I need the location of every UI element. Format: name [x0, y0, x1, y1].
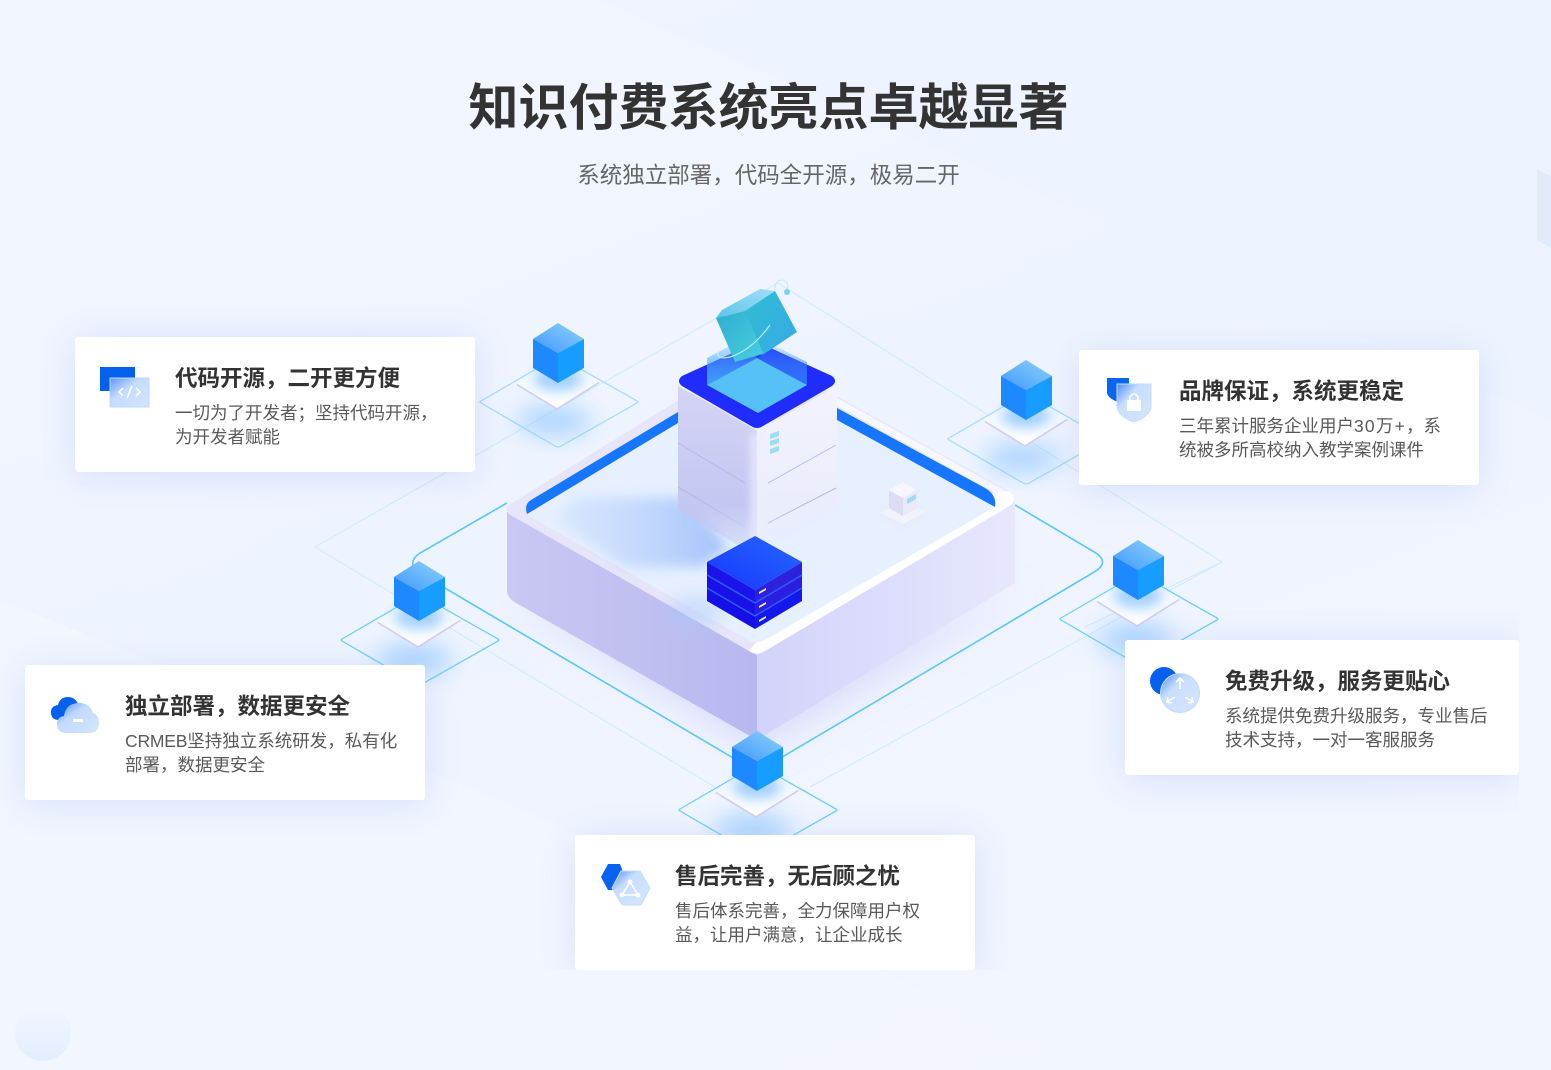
card text: 部署，数据更安全 — [125, 755, 265, 775]
card text — [676, 902, 920, 943]
stack shadow — [667, 596, 723, 628]
icon: code window — [100, 367, 150, 408]
card text: 系统提供免费升级服务，专业售后 — [1225, 706, 1488, 726]
card heading: 品牌保证，系统更稳定 — [1179, 379, 1404, 404]
card text: CRMEB坚持独立系统研发，私有化 — [125, 731, 397, 751]
node: top right — [948, 360, 1106, 484]
card heading: 免费升级，服务更贴心 — [1225, 669, 1450, 694]
platform surface — [527, 420, 991, 642]
card text — [1226, 706, 1487, 748]
node: left — [341, 561, 499, 685]
blue server stack — [707, 536, 802, 629]
rim back right — [837, 398, 1008, 492]
faint outer diamond lines — [315, 283, 1222, 790]
glass walls — [707, 338, 757, 385]
card text: 售后体系完善，全力保障用户权 — [675, 901, 920, 921]
platform shadow — [500, 590, 1025, 750]
card text: 为开发者赋能 — [175, 427, 280, 447]
platform right wall — [757, 500, 1015, 740]
subtitle: 系统独立部署，代码全开源，极易二开 — [577, 163, 960, 188]
icon: cloud — [51, 697, 99, 733]
card text: 统被多所高校纳入教学案例课件 — [1179, 440, 1424, 460]
panel: 品牌保证 — [1079, 350, 1479, 485]
node: bottom — [679, 731, 837, 855]
card text — [1179, 416, 1441, 460]
card text — [175, 403, 438, 447]
tower body — [678, 386, 837, 556]
central platform — [500, 354, 1025, 750]
platform rim — [506, 354, 1014, 654]
icon: upgrade circle — [1150, 667, 1200, 713]
tower vents — [770, 431, 779, 454]
floating teal cube — [716, 280, 797, 362]
tower right face — [758, 392, 837, 473]
panel: 免费升级 — [1125, 640, 1519, 775]
icon: shield — [1107, 378, 1152, 422]
card text: 三年累计服务企业用户30万+，系 — [1179, 416, 1441, 436]
card text — [125, 731, 397, 775]
tower screen — [707, 358, 807, 413]
bright connector diamond — [413, 503, 1102, 772]
card text: 一切为了开发者；坚持代码开源， — [175, 403, 438, 423]
tower cast shadow — [556, 497, 728, 567]
isometric illustration — [314, 280, 1223, 835]
title: 知识付费系统亮点卓越显著 — [468, 80, 1068, 136]
card text: 益，让用户满意，让企业成长 — [675, 925, 902, 945]
platform left wall — [507, 510, 757, 740]
blue strip right — [837, 408, 995, 507]
tower left face — [678, 386, 757, 556]
blue strip left — [526, 412, 678, 514]
card heading: 售后完善，无后顾之忧 — [675, 864, 900, 889]
server tower — [678, 338, 837, 556]
small computer — [880, 482, 926, 527]
card heading: 独立部署，数据更安全 — [125, 694, 350, 719]
panel: 售后完善 — [575, 835, 975, 970]
tower top — [679, 344, 835, 428]
panel: 独立部署 — [25, 665, 425, 800]
card heading: 代码开源，二开更方便 — [175, 366, 400, 391]
rim white front right — [749, 491, 1014, 654]
node: top left — [480, 323, 638, 447]
node: right — [1060, 540, 1218, 664]
panel: 代码开源 — [75, 337, 475, 472]
icon: hexagon — [601, 864, 650, 906]
card text: 技术支持，一对一客服服务 — [1225, 730, 1435, 750]
